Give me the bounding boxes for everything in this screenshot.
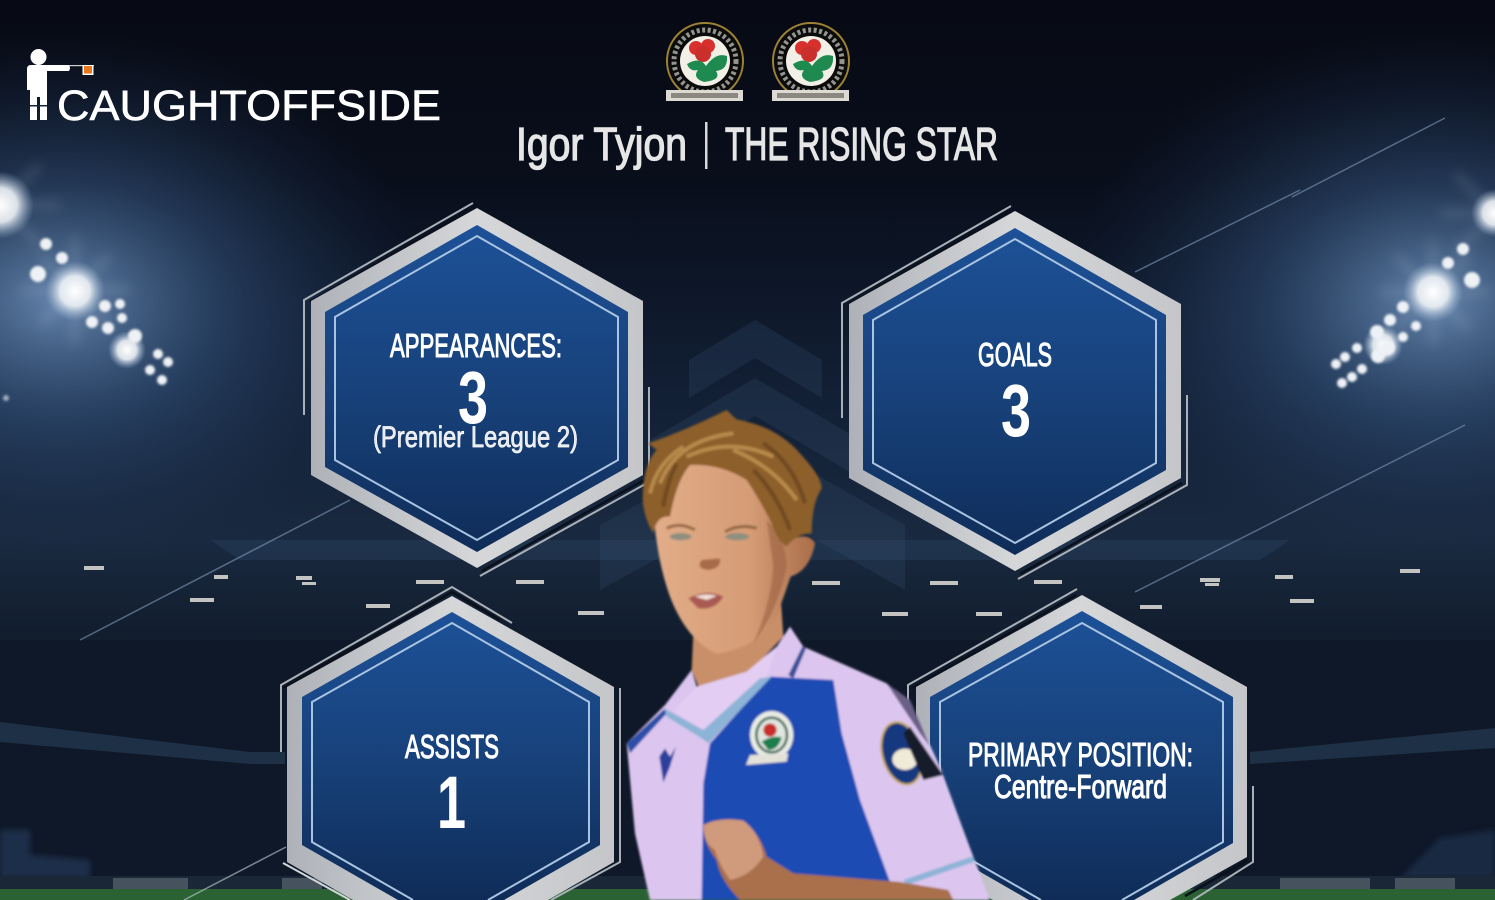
wordmark: CAUGHTOFFSIDE <box>57 82 441 130</box>
value: 1 <box>437 761 466 844</box>
value: Centre-Forward <box>994 768 1167 805</box>
label: PRIMARY POSITION: <box>968 736 1193 773</box>
panel: primary position <box>908 589 1253 900</box>
player photo illustration <box>627 410 990 900</box>
fist and forearm <box>703 819 953 900</box>
hexagon frame <box>281 587 620 900</box>
value: 3 <box>1001 369 1031 452</box>
head <box>653 457 815 654</box>
icon: club badge left <box>666 23 743 101</box>
hexagon frame <box>304 203 649 576</box>
icon: linesman with flag <box>27 49 94 120</box>
left floodlights <box>0 165 173 401</box>
hexagon frame <box>842 206 1187 579</box>
title: Igor Tyjon <box>516 118 687 170</box>
hexagon frame <box>908 589 1253 900</box>
panel: appearances <box>304 203 649 576</box>
title: THE RISING STAR <box>725 118 998 170</box>
sleeve sponsor patch <box>875 718 943 789</box>
CaughtOffside logo <box>27 49 441 130</box>
jersey <box>627 587 990 900</box>
right floodlights <box>1331 173 1495 388</box>
panel: assists <box>281 587 620 900</box>
competition note: (Premier League 2) <box>373 421 578 454</box>
club badges <box>666 23 849 101</box>
background chevrons <box>600 320 905 590</box>
label: ASSISTS <box>405 728 499 765</box>
label: APPEARANCES: <box>390 327 562 364</box>
label: GOALS <box>978 336 1052 373</box>
title <box>516 118 998 170</box>
stadium roof lights <box>84 566 1420 616</box>
club crest <box>746 711 793 765</box>
panel: goals <box>842 206 1187 579</box>
value: 3 <box>458 356 488 439</box>
icon: club badge right <box>772 23 849 101</box>
hair <box>643 410 822 547</box>
